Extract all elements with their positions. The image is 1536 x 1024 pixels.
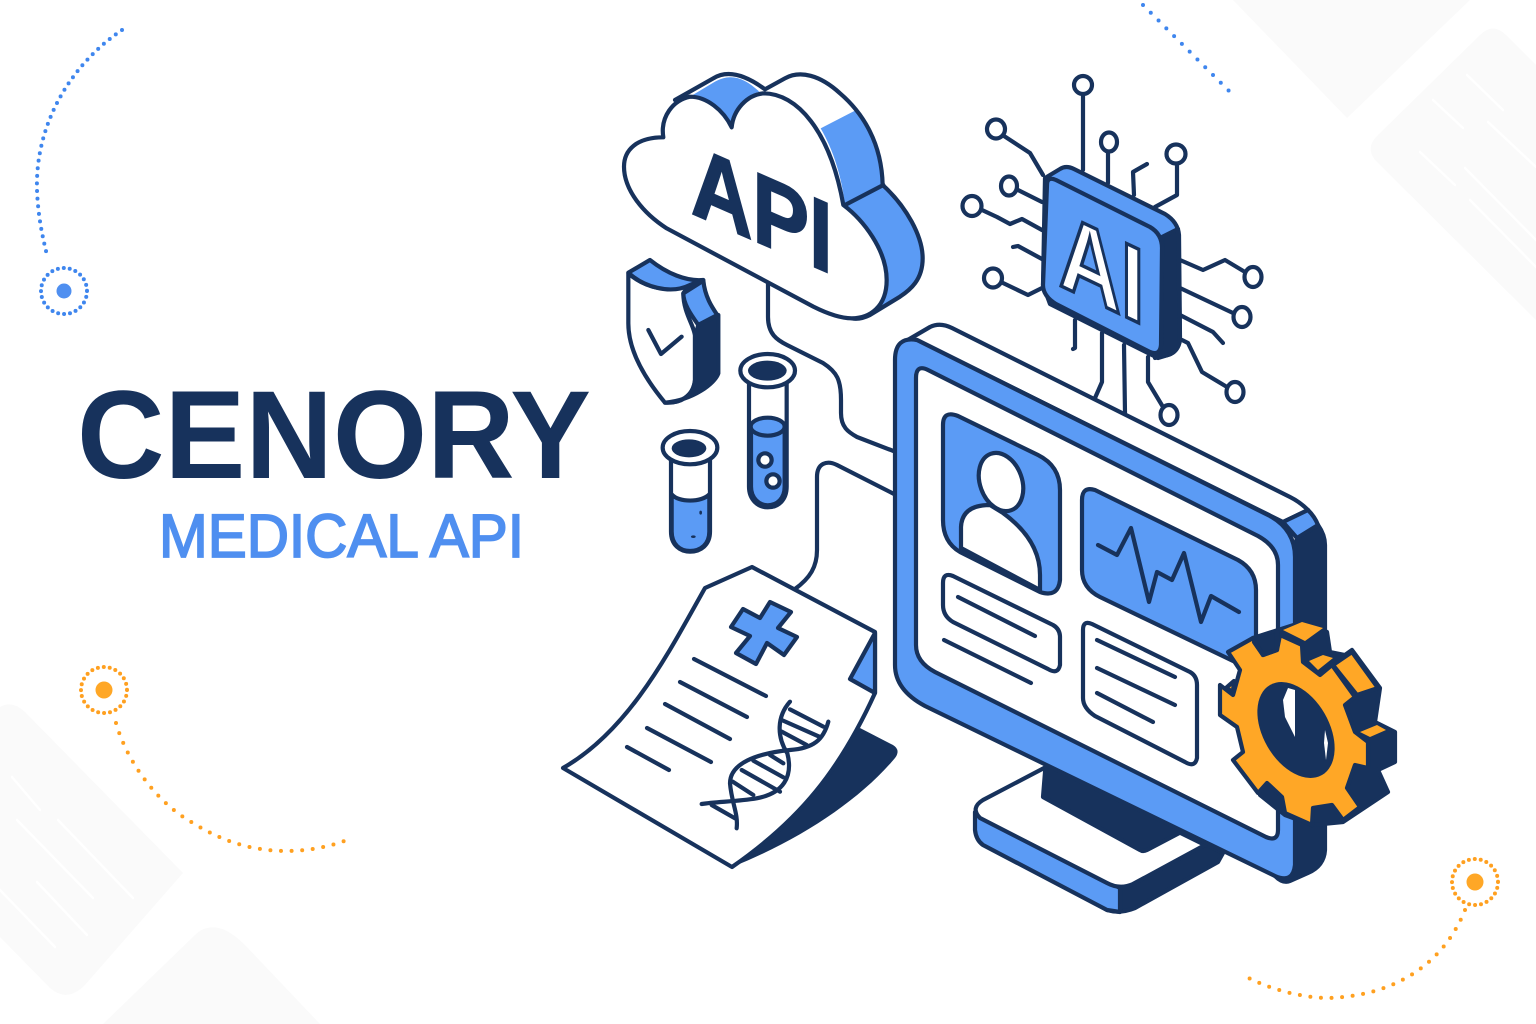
decorative dotted arc: lower right orange: [1243, 859, 1498, 998]
icon: API cloud: [624, 74, 923, 319]
icon: tall test tube: [740, 354, 795, 507]
circuit traces: [962, 76, 1262, 425]
chip body: [1043, 167, 1180, 358]
report card: [1083, 623, 1197, 764]
icon: short test tube: [663, 431, 717, 552]
title: CENORY: [77, 366, 591, 505]
subtitle: MEDICAL API: [159, 502, 524, 570]
document shadow: [732, 728, 898, 867]
icon: AI chip with circuit traces: [962, 76, 1262, 425]
document text lines: [627, 659, 766, 770]
monitor stand neck: [1043, 760, 1185, 851]
icon: monitor: [895, 325, 1325, 912]
connector: document to monitor: [795, 463, 896, 589]
patient info card: [943, 575, 1060, 683]
medical cross: [731, 602, 797, 664]
monitor side: [1275, 525, 1325, 882]
gear hole: [1241, 668, 1351, 792]
patient card: [943, 414, 1060, 594]
monitor top edge: [906, 325, 1308, 522]
document sheet: [563, 567, 875, 867]
decorative dotted arc: top left blue: [37, 30, 122, 314]
icon: shield: [628, 260, 718, 403]
monitor stand base: [975, 767, 1223, 912]
gear face: [1220, 635, 1368, 825]
decorative dotted arc: lower left orange: [81, 667, 352, 851]
vitals waveform card: [1082, 489, 1256, 672]
icon: gear: [1220, 622, 1395, 825]
icon: document with cross and DNA: [563, 567, 898, 867]
chip label: AI: [1059, 190, 1145, 349]
gear back: [1253, 622, 1395, 825]
monitor screen: [916, 368, 1278, 838]
DNA helix: [702, 702, 828, 828]
connector: cloud to monitor: [768, 283, 896, 452]
cloud label: API: [691, 124, 833, 296]
monitor bezel: [895, 339, 1295, 878]
document fold: [850, 633, 875, 693]
decorative dotted arc: top right blue: [1143, 5, 1234, 96]
